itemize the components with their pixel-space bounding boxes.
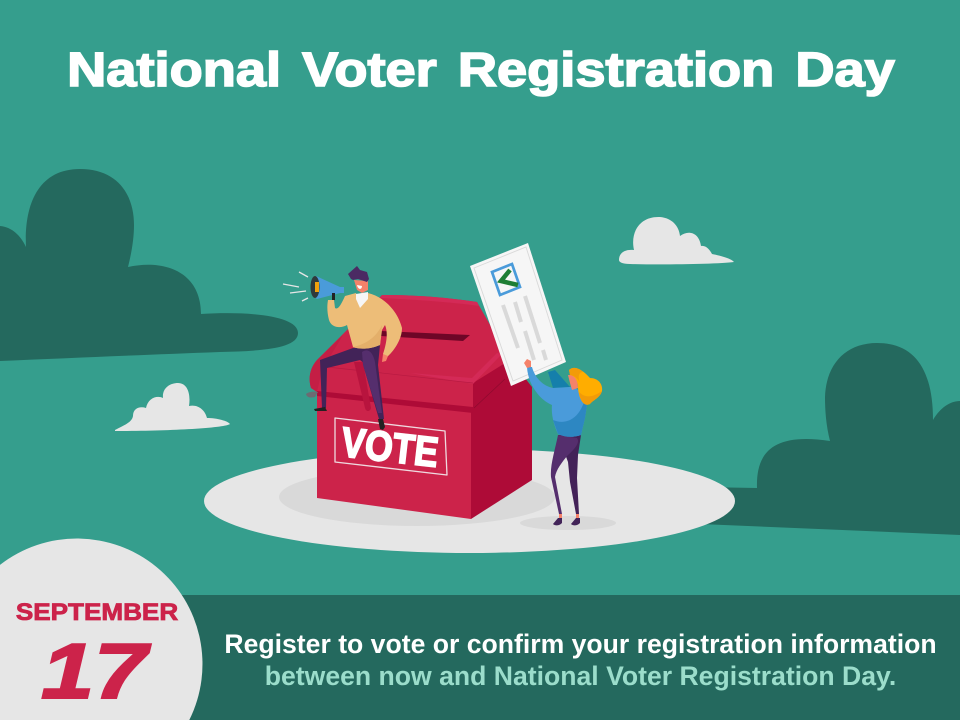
lid crease [327,367,473,383]
lid shadow [317,391,473,413]
box right side [471,355,532,519]
face [568,375,578,390]
side crease [474,379,505,408]
right leg [558,435,581,514]
megaphone bell [310,276,320,298]
leg shadow on box [354,362,371,411]
sweater shade [353,325,382,349]
shoes [553,518,580,525]
vote text: VOTE [339,420,441,477]
ballot card [470,243,566,386]
straight leg [362,350,384,419]
cloud lower left [115,383,230,431]
vote label [335,418,447,475]
woman [524,359,602,525]
megaphone cone [313,276,344,299]
sweater [327,293,402,357]
megaphone handle [332,293,335,300]
sweater [527,367,587,437]
left bush [0,169,298,361]
grey far shoe [306,392,318,398]
box front [317,392,471,519]
hair [569,368,602,405]
shoes [314,407,385,430]
smile [357,285,362,289]
footer message: between now and National Voter Registration Day. [265,661,896,691]
bent leg [320,345,380,408]
slot [380,331,470,341]
man with megaphone [283,266,402,430]
ground ellipse [204,449,735,553]
lid left overhang [310,335,343,392]
card paper [470,243,566,386]
left leg [551,435,578,514]
date circle [0,539,202,720]
footer message [224,629,937,691]
ballot box [310,295,532,519]
footer message: Register to vote or confirm your registration information [224,629,937,659]
sweater shade [553,402,587,437]
sound lines [283,272,308,301]
checkbox [492,264,520,295]
hair [348,266,369,282]
date month: SEPTEMBER [16,599,178,626]
woman shadow [520,516,616,530]
text lines [503,296,546,360]
check mark [501,270,518,285]
box shadow [279,468,555,526]
ankles [559,514,579,519]
lid [310,295,510,408]
date day: 17 [41,627,147,715]
hand [524,359,531,368]
face [354,280,368,293]
collar [356,292,368,308]
title: National Voter Registration Day [67,44,895,97]
far arm [548,370,570,388]
right bush [700,343,960,535]
hand [382,354,388,362]
lid ridge [380,295,502,384]
footer band [0,595,960,720]
cloud upper right [619,217,734,264]
